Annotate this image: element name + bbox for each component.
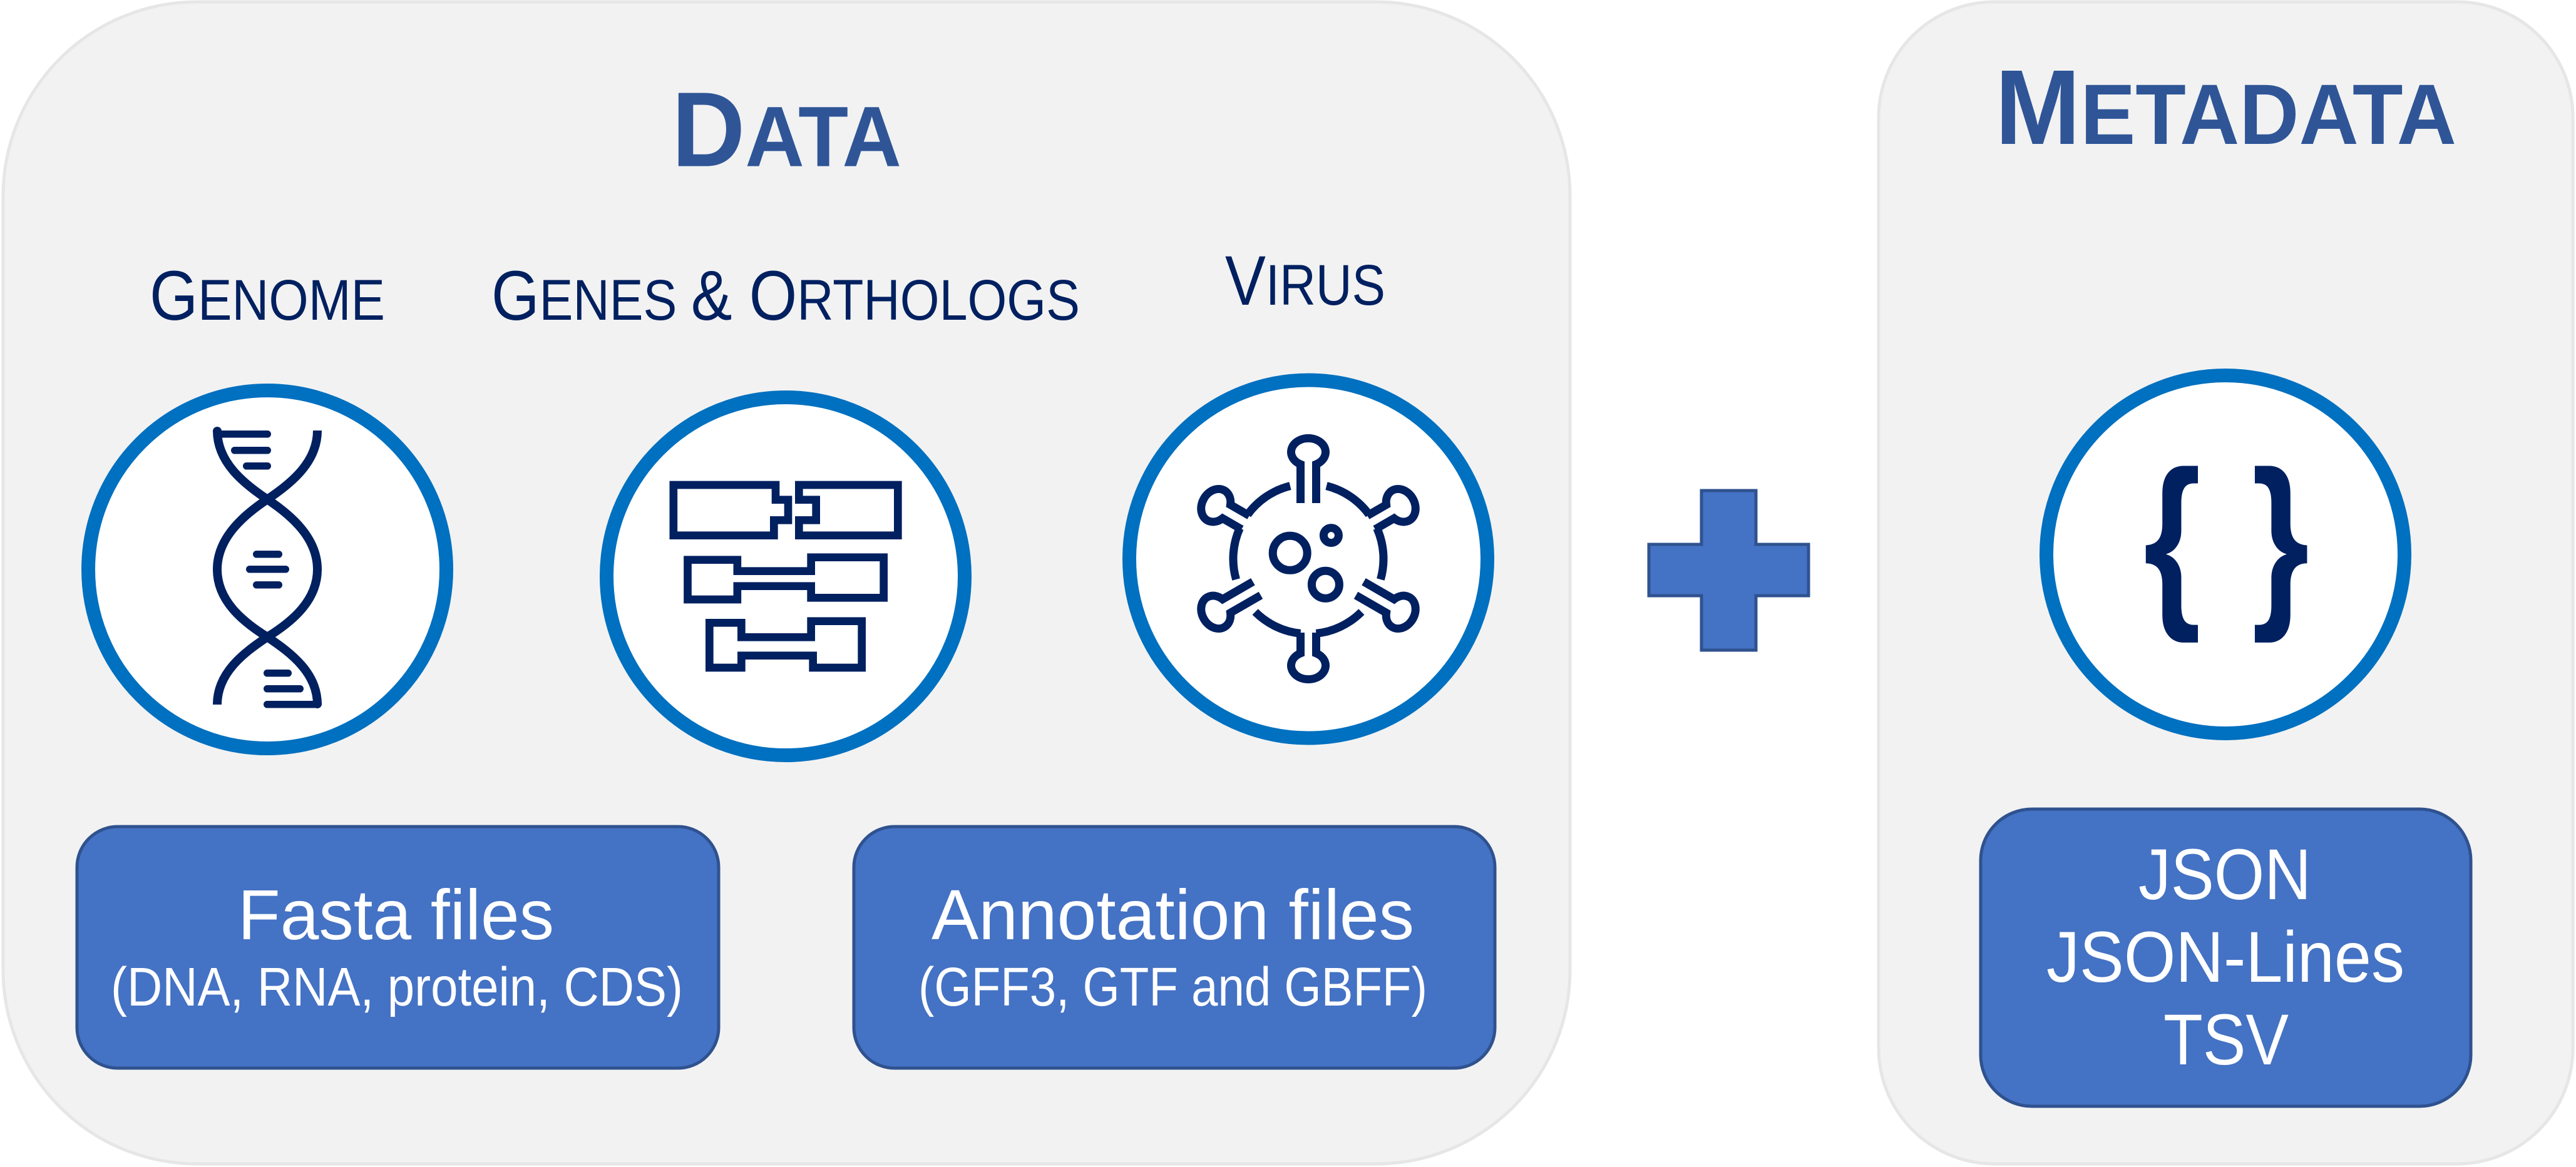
panel: metadata	[1879, 2, 2573, 1164]
icon: virus	[1129, 380, 1487, 738]
heading: genes and orthologs: GENES & ORTHOLOGS	[491, 257, 1080, 335]
label: fasta files: Fasta files	[238, 875, 554, 954]
label: annotation files: Annotation files	[931, 875, 1414, 954]
label: tsv: TSV	[2163, 1000, 2289, 1080]
icon: curly braces	[2046, 375, 2404, 733]
box: fasta files	[77, 827, 719, 1068]
icon: plus	[1649, 491, 1809, 650]
icon: genes and orthologs	[607, 397, 965, 755]
panel: data	[3, 2, 1570, 1164]
label: annotation file types: (GFF3, GTF and GBFF)	[918, 957, 1427, 1017]
heading: metadata: METADATA	[1995, 48, 2456, 167]
box: annotation files	[854, 827, 1495, 1068]
label: json: JSON	[2138, 835, 2311, 915]
label: json-lines: JSON-Lines	[2046, 917, 2404, 997]
heading: virus: VIRUS	[1225, 242, 1385, 320]
heading: genome: GENOME	[150, 257, 385, 335]
icon: curly braces: }	[2252, 432, 2309, 645]
box: metadata formats	[1981, 809, 2471, 1106]
label: fasta file types: (DNA, RNA, protein, CDS)	[111, 957, 683, 1017]
icon: curly braces: {	[2143, 432, 2201, 645]
icon: dna helix	[88, 390, 446, 748]
heading: data: DATA	[672, 70, 901, 189]
